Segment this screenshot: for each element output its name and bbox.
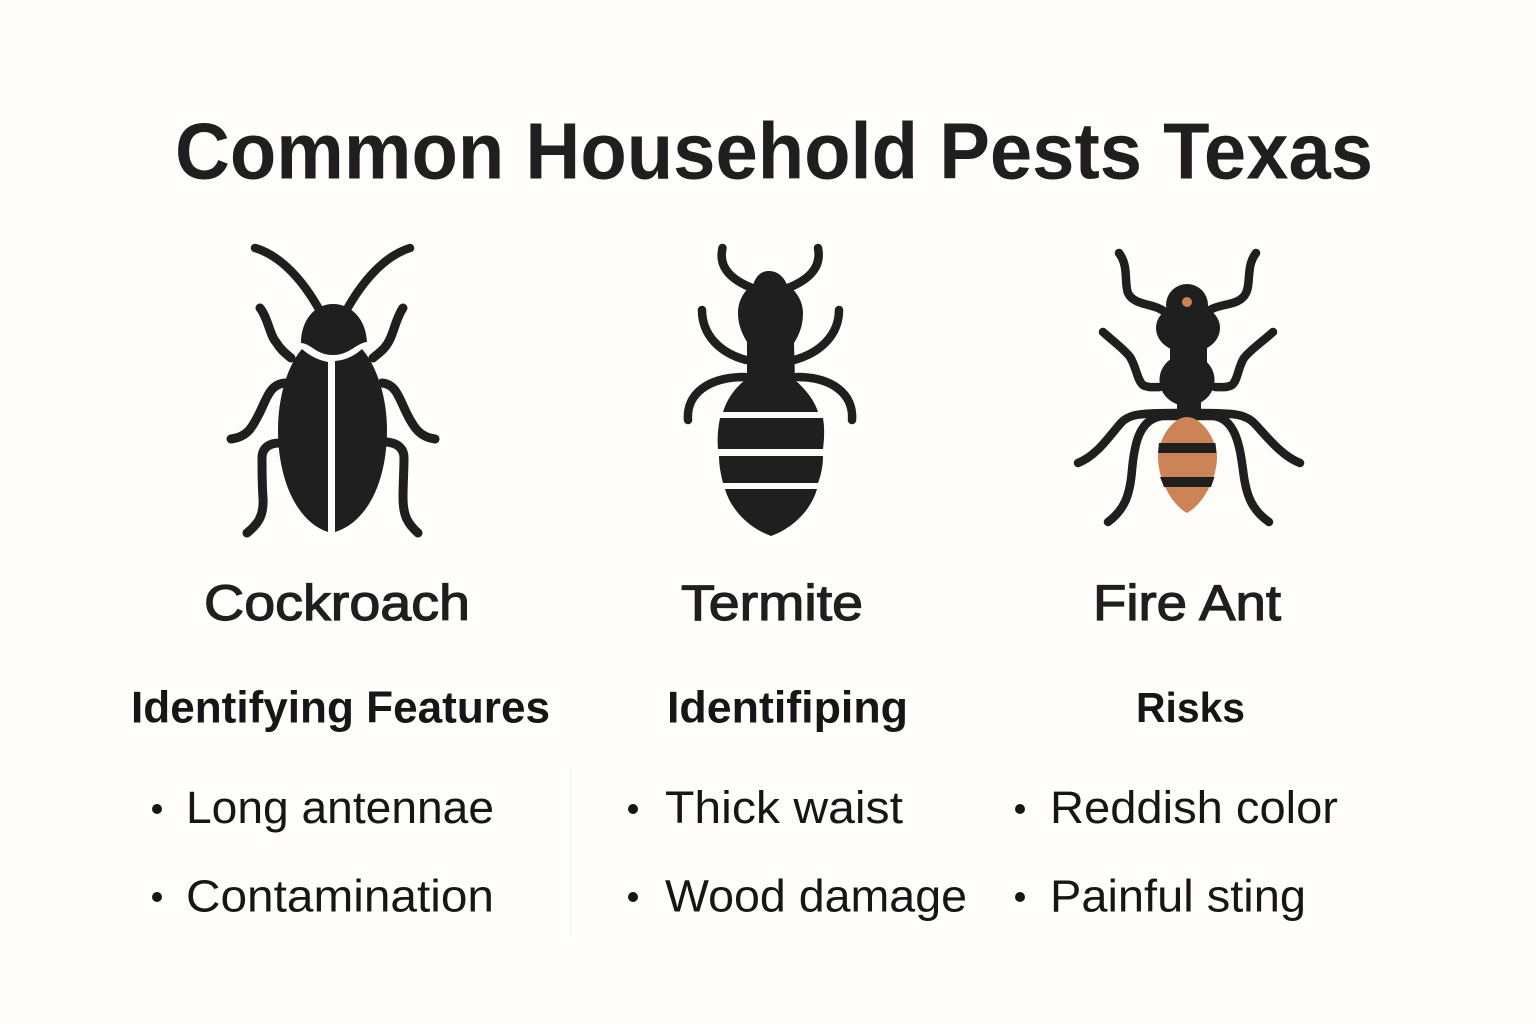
icon: cockroach bbox=[231, 248, 435, 533]
list: fire ant risks bbox=[1015, 782, 1338, 922]
icon: termite bbox=[688, 248, 852, 536]
list: termite features: Wood damage bbox=[665, 870, 967, 922]
column divider bbox=[570, 768, 572, 935]
pest name: Termite: Termite bbox=[681, 575, 863, 631]
pest name: Cockroach: Cockroach bbox=[204, 575, 470, 631]
heading: Identifying Features: Identifying Features bbox=[131, 684, 550, 733]
list: cockroach features: Contamination bbox=[186, 870, 494, 922]
list: fire ant risks: Painful sting bbox=[1050, 870, 1306, 922]
list: cockroach features bbox=[152, 782, 494, 922]
list: termite features bbox=[628, 782, 967, 922]
list: fire ant risks: Reddish color bbox=[1050, 782, 1338, 833]
heading: Identifiping: Identifiping bbox=[667, 684, 908, 733]
icon: fire ant bbox=[1078, 253, 1300, 522]
pest name: Fire Ant: Fire Ant bbox=[1093, 575, 1281, 631]
list: termite features: Thick waist bbox=[665, 782, 903, 833]
list: cockroach features: Long antennae bbox=[186, 782, 494, 833]
title: Common Household Pests Texas bbox=[175, 106, 1373, 196]
heading: Risks: Risks bbox=[1136, 684, 1245, 731]
